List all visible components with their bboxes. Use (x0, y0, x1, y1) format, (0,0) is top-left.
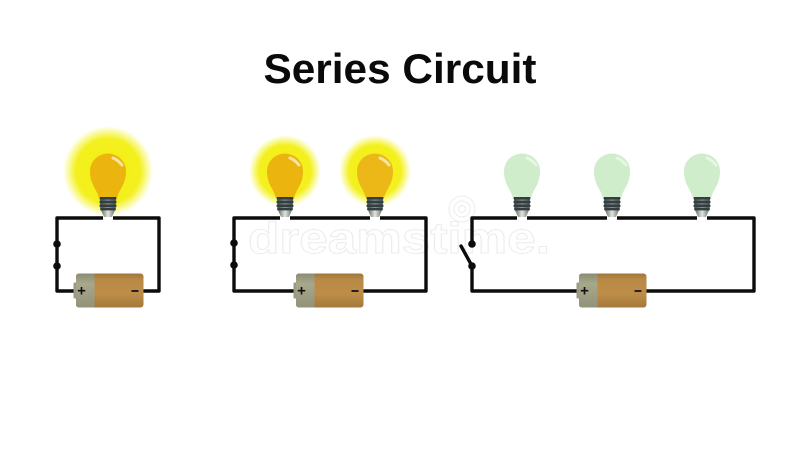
battery (294, 274, 364, 308)
panel: open circuit with three unlit bulbs (461, 154, 754, 308)
glow: two bulbs (249, 135, 411, 207)
battery (576, 274, 646, 308)
watermark: dreamstime. (248, 214, 550, 263)
icon: unlit bulb left (504, 154, 540, 217)
icon: lit bulb right (357, 154, 393, 217)
watermark (248, 196, 550, 263)
glow: single bulb (63, 126, 153, 216)
panel: circuit with one lit bulb (53, 126, 159, 308)
icon: unlit bulb right (684, 154, 720, 217)
battery (74, 274, 144, 308)
open switch (461, 240, 476, 270)
icon: unlit bulb middle (594, 154, 630, 217)
icon: lit bulb left (267, 154, 303, 217)
wire loop: circuit three (472, 218, 754, 291)
panel: circuit with two lit bulbs (230, 135, 426, 308)
title: Series Circuit (264, 45, 537, 92)
closed switch contacts (230, 239, 238, 269)
icon: lit bulb (90, 154, 126, 217)
wire loop: circuit two (234, 218, 426, 291)
closed switch contacts (53, 240, 61, 270)
wire loop: circuit one (57, 218, 159, 291)
